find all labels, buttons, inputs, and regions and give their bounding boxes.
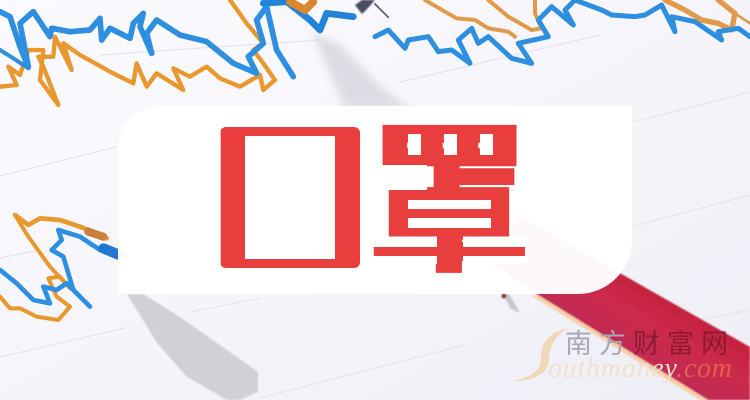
title: 口罩: [220, 124, 525, 273]
pen tip: top: [355, 0, 375, 14]
watermark url: outhmoney.com: [548, 353, 732, 384]
chart lines: top right: [375, 0, 750, 63]
title character 口: 口: [205, 49, 377, 329]
title character 罩: 罩: [368, 73, 531, 303]
watermark: southmoney logo: [512, 322, 732, 384]
chart lines: lower left: [0, 215, 120, 320]
counters opened in 罩: [372, 134, 528, 264]
chart lines: top left: [0, 0, 353, 105]
watermark swoosh S: [512, 328, 569, 381]
paper shadow: lower: [127, 294, 258, 400]
title panel: [118, 106, 632, 294]
watermark chinese name: 南方 财富网: [565, 322, 728, 361]
paper shadow: upper: [312, 32, 410, 108]
red pencil: [490, 216, 750, 400]
